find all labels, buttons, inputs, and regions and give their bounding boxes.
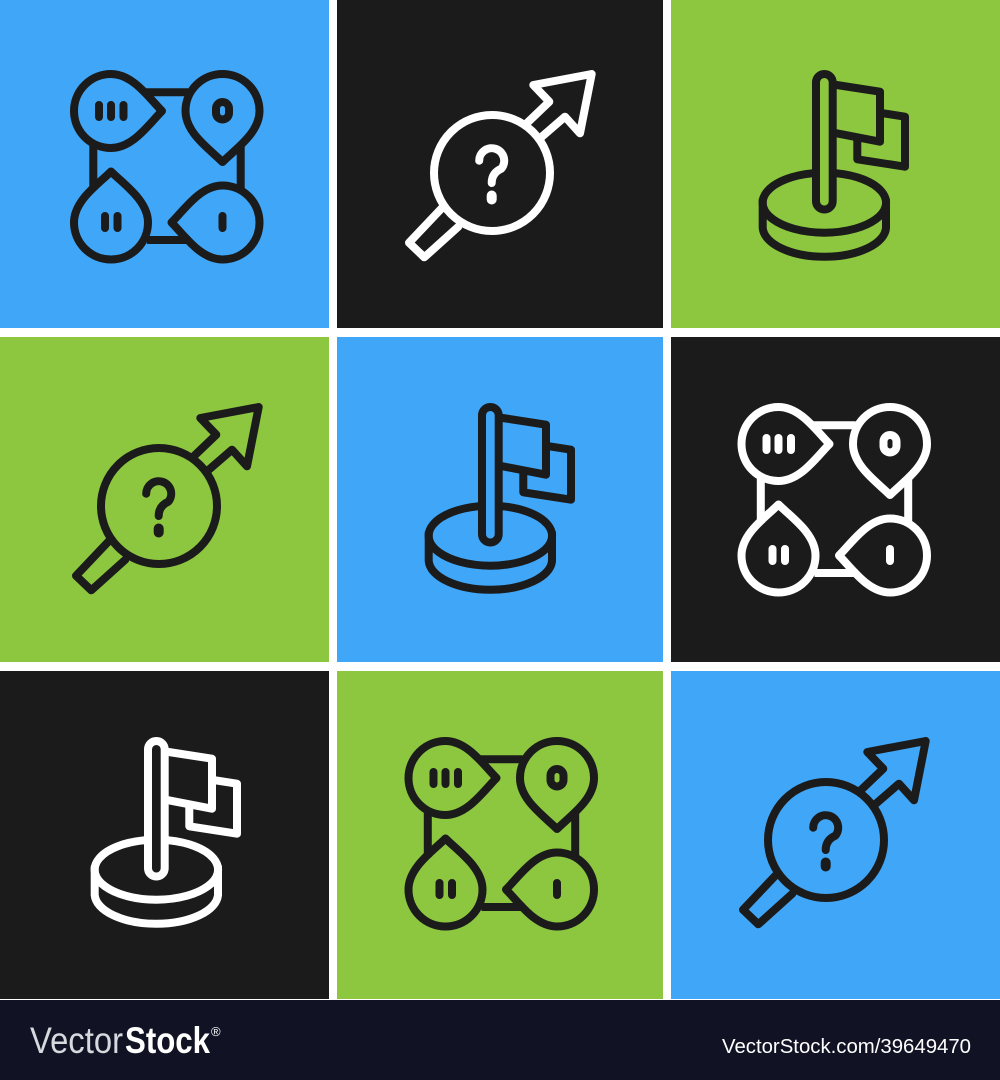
icon: four connected map pins xyxy=(408,741,594,926)
panel: blue, flag icon xyxy=(337,337,663,662)
panel: green, map pins icon xyxy=(337,671,663,999)
icon: question mark circle with arrow xyxy=(409,74,592,257)
panel: green, flag icon xyxy=(671,0,1000,328)
logo: VectorStock: Stock xyxy=(125,1020,210,1061)
logo: VectorStock: Vector xyxy=(30,1020,123,1061)
panel: blue, question arrow icon xyxy=(671,671,1000,999)
icon: flag on round base xyxy=(429,407,571,590)
registered mark: ® xyxy=(211,1024,221,1039)
panel: black, flag icon xyxy=(0,671,329,999)
footer bar xyxy=(0,1000,1000,1080)
logo: VectorStock xyxy=(30,1020,210,1061)
icon: four connected map pins xyxy=(742,407,927,592)
image id url: VectorStock.com/39649470 xyxy=(722,1036,971,1058)
icon: four connected map pins xyxy=(74,74,260,260)
icon: question mark circle with arrow xyxy=(76,407,259,590)
icon: question mark circle with arrow xyxy=(743,741,926,924)
panel: black, map pins icon xyxy=(671,337,1000,662)
icon: flag on round base xyxy=(95,741,237,924)
icon: flag on round base xyxy=(763,74,905,257)
panel: green, question arrow icon xyxy=(0,337,329,662)
panel: black, question arrow icon xyxy=(337,0,663,328)
panel: blue, map pins icon xyxy=(0,0,329,328)
